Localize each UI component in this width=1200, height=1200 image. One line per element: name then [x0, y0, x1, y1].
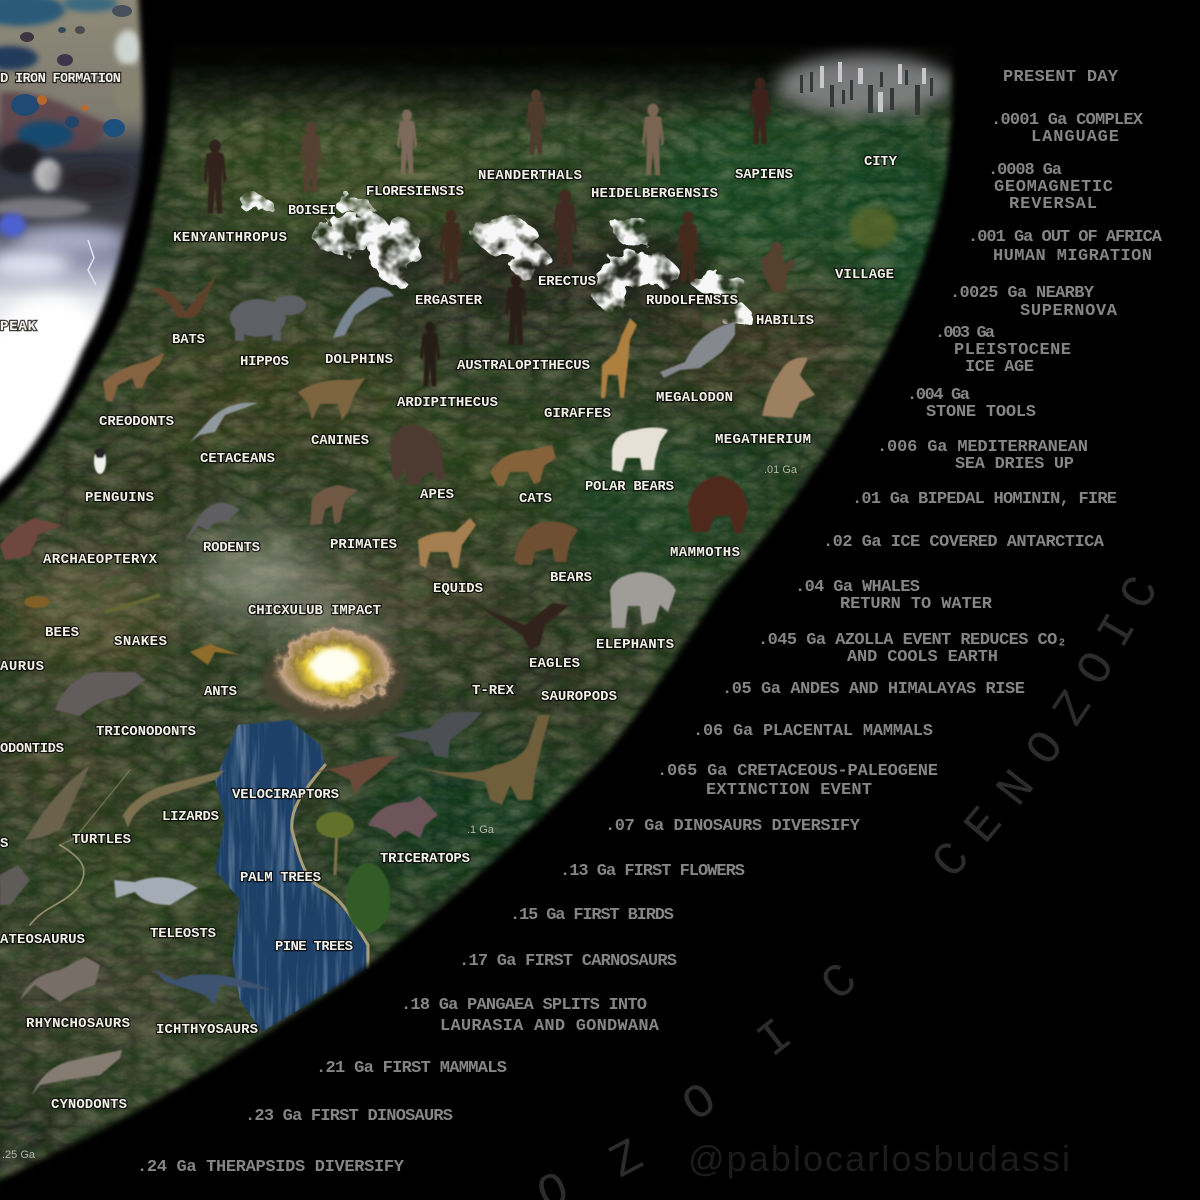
label: megatherium: MEGATHERIUM: [715, 432, 811, 448]
era label: mesozoic: I: [748, 1010, 804, 1070]
event: pleistocene ice age: PLEISTOCENE: [954, 341, 1071, 360]
event: dinosaurs diversify: .07 Ga DINOSAURS DIVERSIFY: [605, 817, 861, 836]
event: bipedal hominin: .01 Ga BIPEDAL HOMININ, FIRE: [852, 490, 1117, 509]
watermark: @pablocarlosbudassi: [688, 1138, 1070, 1179]
label: archaeopteryx: ARCHAEOPTERYX: [43, 552, 158, 568]
era label: cenozoic: Z: [1044, 682, 1105, 736]
icon: rodent: [185, 502, 240, 542]
icon: turtle: [25, 765, 90, 840]
icon: rhynchosaur: [20, 957, 100, 1002]
icon: bat: [150, 272, 218, 318]
label: heidelbergensis: HEIDELBERGENSIS: [591, 186, 718, 202]
icon: giraffe: [601, 318, 637, 398]
event: whales: .04 Ga WHALES: [795, 578, 920, 597]
label: ichthyosaurs: ICHTHYOSAURS: [156, 1022, 258, 1038]
icon: elephant: [610, 572, 676, 628]
icon: boisei: [300, 122, 322, 192]
label: creodonts: CREODONTS: [99, 414, 174, 430]
era label: cenozoic: I: [1088, 606, 1149, 658]
event: out of africa: .001 Ga OUT OF AFRICA: [968, 228, 1163, 247]
event: complex language: LANGUAGE: [1031, 128, 1119, 147]
label: rudolfensis: RUDOLFENSIS: [646, 293, 738, 309]
event: first birds: .15 Ga FIRST BIRDS: [510, 906, 674, 925]
event: out of africa: [968, 228, 1163, 266]
event: pleistocene ice age: [935, 324, 1071, 377]
label: australopithecus: AUSTRALOPITHECUS: [457, 358, 590, 374]
label: bears: BEARS: [550, 570, 592, 586]
event: geomagnetic reversal: .0008 Ga: [988, 161, 1062, 180]
label: boisei: BOISEI: [288, 203, 336, 219]
icon: cynodont: [32, 1050, 122, 1095]
label: floresiensis: FLORESIENSIS: [366, 184, 464, 200]
icon: plateosaurus: [0, 865, 30, 905]
label: palm trees: PALM TREES: [240, 870, 321, 886]
era label: cenozoic: [923, 568, 1172, 890]
icon: palm tree: [316, 812, 354, 875]
icon: mammoth: [688, 476, 748, 534]
label: velociraptors: VELOCIRAPTORS: [232, 787, 339, 803]
icon: rudolfensis: [677, 212, 699, 282]
event: pangaea: [401, 996, 660, 1036]
label: hippos: HIPPOS: [240, 354, 289, 370]
label: bats: BATS: [172, 332, 205, 348]
label: erectus: ERECTUS: [538, 274, 596, 290]
icon: creodont: [103, 353, 164, 402]
event: extinction: .065 Ga CRETACEOUS-PALEOGENE: [657, 762, 938, 781]
icon: penguin: [94, 448, 106, 474]
label: snakes: SNAKES: [114, 634, 167, 650]
age marker .01 Ga: .01 Ga: [764, 464, 798, 476]
icon: teleost: [114, 877, 198, 905]
age marker .25 Ga: .25 Ga: [2, 1149, 36, 1161]
event: andes himalayas: .05 Ga ANDES AND HIMALAYAS RISE: [722, 680, 1025, 699]
event: nearby supernova: SUPERNOVA: [1020, 302, 1118, 321]
label: cats: CATS: [519, 491, 552, 507]
event: azolla: .045 Ga AZOLLA EVENT REDUCES CO₂: [758, 631, 1067, 650]
event: extinction: [657, 762, 938, 800]
event: geomagnetic reversal: [988, 161, 1113, 214]
event: geomagnetic reversal: REVERSAL: [1009, 195, 1097, 214]
label: ants: ANTS: [204, 684, 237, 700]
chicxulub impact crater: [263, 624, 407, 722]
label: sauropods: SAUROPODS: [541, 689, 617, 705]
event: azolla: AND COOLS EARTH: [847, 648, 998, 667]
animals: [0, 272, 815, 1095]
label: odontids fragment: ODONTIDS: [0, 741, 64, 757]
label: cynodonts: CYNODONTS: [51, 1097, 127, 1113]
icon: lizard: [123, 770, 225, 828]
village: [849, 207, 897, 249]
label: banded iron formation: D IRON FORMATION: [0, 71, 121, 87]
label: habilis: HABILIS: [756, 313, 814, 329]
icon: archaeopteryx: [0, 518, 62, 560]
icon: erectus: [553, 189, 577, 267]
label: eagles: EAGLES: [529, 656, 580, 672]
icon: eagle: [480, 603, 570, 650]
icon: cat: [490, 445, 556, 486]
ocean: [215, 720, 368, 1032]
icon: bee: [24, 596, 50, 608]
event: placental mammals: .06 Ga PLACENTAL MAMMALS: [693, 722, 933, 741]
event: out of africa: HUMAN MIGRATION: [993, 247, 1152, 266]
event: stone tools: .004 Ga: [907, 386, 970, 405]
era label: cenozoic: O: [1016, 722, 1077, 777]
icon: velociraptor: [295, 755, 398, 795]
label: giraffes: GIRAFFES: [544, 406, 611, 422]
era label: mesozoic: O: [674, 1074, 727, 1135]
label: ergaster: ERGASTER: [415, 293, 483, 309]
label: penguins: PENGUINS: [85, 490, 154, 506]
event: therapsids: .24 Ga THERAPSIDS DIVERSIFY: [137, 1158, 405, 1177]
era label: mesozoic: Z: [602, 1130, 652, 1191]
event: complex language: [991, 111, 1144, 147]
icon: ape: [390, 425, 445, 485]
label: turtles: TURTLES: [72, 832, 131, 848]
icon: megatherium: [762, 358, 815, 418]
event: first mammals: .21 Ga FIRST MAMMALS: [316, 1059, 507, 1078]
event: mediterranean: [877, 438, 1088, 474]
label: apes: APES: [420, 487, 454, 503]
label: triceratops: TRICERATOPS: [380, 851, 470, 867]
event: pleistocene ice age: .003 Ga: [935, 324, 995, 343]
icon: ergaster: [439, 209, 463, 284]
label: ardipithecus: ARDIPITHECUS: [397, 395, 498, 411]
icon: ardipithecus: [420, 322, 440, 386]
label: plateosaurus fragment: ATEOSAURUS: [0, 932, 85, 948]
icon: ichthyosaur: [155, 970, 272, 1005]
event: present day: PRESENT DAY: [1003, 68, 1119, 87]
icon: triconodont: [55, 672, 145, 716]
label: t-rex: T-REX: [472, 683, 515, 699]
label: pine trees: PINE TREES: [275, 939, 353, 955]
event: stone tools: [907, 386, 1036, 422]
icon: neanderthal: [526, 90, 546, 154]
icon: australopithecus: [505, 274, 527, 345]
label: triconodonts: TRICONODONTS: [96, 724, 196, 740]
coastline and rivers: [30, 765, 368, 968]
icon: hippo: [230, 295, 306, 341]
icon: sauropod: [408, 715, 550, 805]
event: stone tools: STONE TOOLS: [926, 403, 1036, 422]
era label: cenozoic: O: [1067, 643, 1128, 696]
snow-capped mountains: [239, 194, 749, 329]
label: kenyanthropus: KENYANTHROPUS: [173, 230, 287, 246]
icon: cetacean: [190, 403, 258, 442]
label: primates: PRIMATES: [330, 537, 397, 553]
icon: dolphin: [333, 287, 394, 338]
city skyline: [777, 55, 953, 115]
icon: triceratops: [368, 796, 438, 838]
era label: cenozoic: C: [1111, 568, 1172, 619]
event: pangaea: .18 Ga PANGAEA SPLITS INTO: [401, 996, 647, 1015]
icon: canine: [298, 378, 365, 420]
label: rhynchosaurs: RHYNCHOSAURS: [26, 1016, 130, 1032]
label: elephants: ELEPHANTS: [596, 637, 674, 653]
event: mediterranean: .006 Ga MEDITERRANEAN: [877, 438, 1088, 457]
icon: bear: [514, 522, 578, 565]
icon: kenyanthropus: [203, 139, 227, 214]
label: sapiens: SAPIENS: [735, 167, 793, 183]
label: polar bears: POLAR BEARS: [585, 479, 674, 495]
chicxulub mist: [50, 545, 375, 655]
era label: mesozoic: [530, 954, 869, 1200]
timeline of events: [137, 68, 1163, 1177]
event: first flowers: .13 Ga FIRST FLOWERS: [560, 862, 745, 881]
label: city: CITY: [864, 154, 898, 170]
event: geomagnetic reversal: GEOMAGNETIC: [994, 178, 1113, 197]
icon: primate: [310, 485, 358, 525]
icon: sapiens: [750, 78, 770, 144]
era label: mesozoic: C: [812, 954, 869, 1013]
age marker .1 Ga: .1 Ga: [467, 824, 495, 836]
icon: snake: [105, 595, 160, 612]
icon: t-rex: [390, 712, 482, 758]
icon: heidelbergensis: [642, 103, 664, 175]
era label: cenozoic: N: [987, 761, 1048, 817]
event: mediterranean: SEA DRIES UP: [955, 455, 1074, 474]
event: pangaea: LAURASIA AND GONDWANA: [440, 1017, 660, 1036]
event: first carnosaurs: .17 Ga FIRST CARNOSAURS: [459, 952, 677, 971]
label: dinosaur fragment: AURUS: [0, 659, 44, 675]
label: dolphins: DOLPHINS: [325, 352, 393, 368]
icon: equid: [418, 518, 476, 568]
event: nearby supernova: [950, 284, 1118, 321]
label: megalodon: MEGALODON: [656, 390, 733, 406]
event: pleistocene ice age: ICE AGE: [965, 358, 1034, 377]
label: teleosts: TELEOSTS: [150, 926, 216, 942]
event: first dinosaurs: .23 Ga FIRST DINOSAURS: [245, 1107, 453, 1126]
event: nearby supernova: .0025 Ga NEARBY: [950, 284, 1095, 303]
icon: pine tree: [346, 863, 390, 933]
event: complex language: .0001 Ga COMPLEX: [991, 111, 1144, 130]
label: chicxulub impact: CHICXULUB IMPACT: [248, 603, 381, 619]
label: cetaceans: CETACEANS: [200, 451, 275, 467]
icon: habilis: [761, 242, 795, 292]
icon: megalodon: [660, 322, 735, 378]
label: equids: EQUIDS: [433, 581, 483, 597]
label: fragment s: S: [0, 836, 8, 852]
label: bees: BEES: [45, 625, 79, 641]
label: village: VILLAGE: [835, 267, 894, 283]
mountain shadows: [310, 215, 710, 305]
icon: polar bear: [612, 428, 668, 472]
era label: cenozoic: C: [923, 832, 982, 890]
era label: cenozoic: E: [955, 798, 1015, 855]
icon: ant: [190, 644, 240, 665]
event: azolla: [758, 631, 1067, 667]
hominids: [203, 78, 795, 386]
label: peak: PEAK: [0, 319, 37, 335]
event: extinction: EXTINCTION EVENT: [706, 781, 872, 800]
icon: floresiensis: [397, 110, 417, 174]
label: neanderthals: NEANDERTHALS: [478, 168, 582, 184]
label: rodents: RODENTS: [203, 540, 260, 556]
event: antarctica: .02 Ga ICE COVERED ANTARCTICA: [823, 533, 1105, 552]
map labels: [0, 71, 898, 1161]
event: whales: RETURN TO WATER: [840, 595, 993, 614]
panel: Archean cloud and iron formation map: [0, 0, 150, 505]
label: mammoths: MAMMOTHS: [670, 545, 740, 561]
event: whales: [795, 578, 993, 614]
label: lizards: LIZARDS: [162, 809, 219, 825]
label: canines: CANINES: [311, 433, 369, 449]
